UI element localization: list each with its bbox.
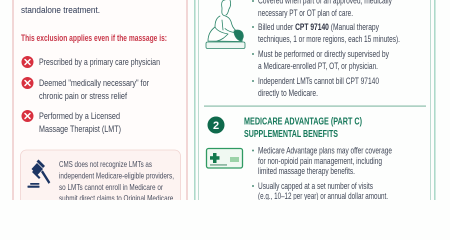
badge: number 2: 2 xyxy=(213,120,219,132)
panel: Original Medicare exclusion xyxy=(13,0,187,210)
list item: medically necessary: Deemed "medically necessary" for xyxy=(39,78,149,88)
list: Medicare Advantage bullets: Usually capped at a set number of visits xyxy=(258,181,373,191)
list: Medicare Advantage bullets: for non-opioid pain management, including xyxy=(258,156,382,166)
heading: exclusion applies: This exclusion applies even if the massage is: xyxy=(21,33,167,43)
callout: CMS does not recognize LMTs: CMS does not recognize LMTs as xyxy=(59,160,152,169)
icon: gavel xyxy=(28,160,50,188)
icon: insurance card xyxy=(206,148,242,168)
list item: licensed therapist: Performed by a Licensed xyxy=(39,111,120,121)
list: Medicare Advantage bullets: Medicare Advantage plans may offer coverage xyxy=(258,146,392,156)
list item: medically necessary xyxy=(22,77,149,101)
badge: number 2 xyxy=(208,116,224,134)
callout: CMS does not recognize LMTs: independent Medicare-eligible providers, xyxy=(59,172,174,180)
list: Medicare Advantage bullets xyxy=(252,146,392,201)
list: Part B bullets: techniques, 1 or more regions, each 15 minutes). xyxy=(258,34,400,44)
heading: Medicare Advantage supplemental benefits: SUPPLEMENTAL BENEFITS xyxy=(244,129,338,140)
list: Medicare Advantage bullets: limited massage therapy benefits. xyxy=(258,166,355,176)
callout: CMS does not recognize LMTs: so LMTs cannot enroll in Medicare or xyxy=(59,183,163,192)
list: Part B bullets: a Medicare-enrolled PT, OT, or physician. xyxy=(258,61,378,71)
list: Part B bullets: necessary PT or OT plan of care. xyxy=(258,8,353,18)
text: standalone treatment: standalone treatment. xyxy=(21,5,100,15)
list: Part B bullets: Independent LMTs cannot bill CPT 97140 xyxy=(258,76,379,86)
list: Part B bullets: Must be performed or directly supervised by xyxy=(258,49,389,59)
callout: CMS does not recognize LMTs xyxy=(20,150,180,210)
heading: Medicare Advantage supplemental benefits xyxy=(244,116,362,140)
panel: Medicare coverage pathways xyxy=(195,0,435,206)
list item: licensed therapist xyxy=(22,110,121,134)
list: Part B bullets xyxy=(252,0,400,98)
list item: medically necessary: chronic pain or stress relief xyxy=(39,91,127,101)
list item: licensed therapist: Massage Therapist (LMT) xyxy=(39,124,121,134)
heading: Medicare Advantage supplemental benefits: MEDICARE ADVANTAGE (PART C) xyxy=(244,116,362,128)
list item: prescribed xyxy=(22,56,160,68)
list: Part B bullets: Billed under CPT 97140 (Manual therapy xyxy=(258,22,379,32)
list item: prescribed: Prescribed by a primary care physician xyxy=(39,57,160,67)
icon: massage therapist xyxy=(206,0,245,48)
list: Part B bullets: directly to Medicare. xyxy=(258,88,318,98)
